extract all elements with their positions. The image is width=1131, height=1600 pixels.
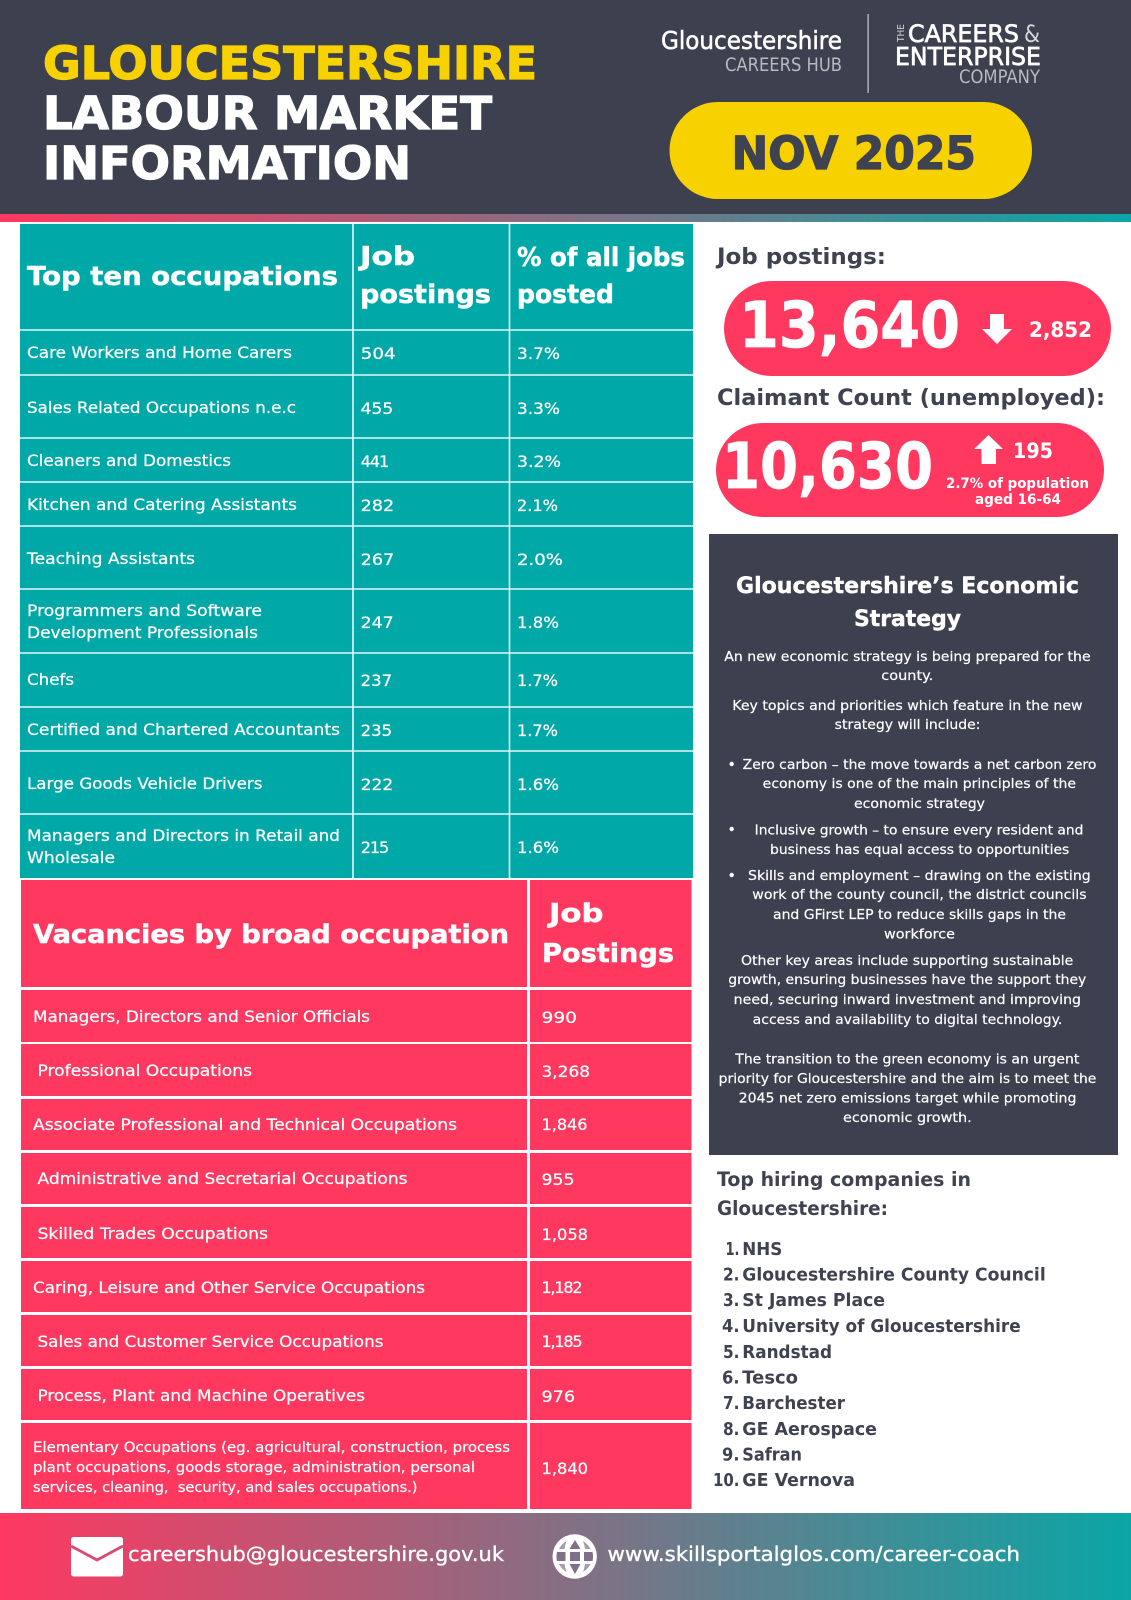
icon: globe: [552, 1534, 597, 1579]
row: Teaching: Teaching Assistants: [26, 549, 195, 568]
panel: job postings: [715, 244, 1111, 376]
row: Accountants: 235: [361, 721, 392, 740]
row: Managers: [21, 990, 692, 1042]
row: Kitchen: [27, 495, 558, 515]
row: Sales: 1,185: [542, 1332, 582, 1351]
row: Managers and Directors: 215: [361, 838, 389, 857]
numbered list: 7.: [723, 1394, 740, 1414]
panel: job postings: 2,852: [1029, 318, 1092, 342]
table header: Job: [358, 242, 415, 272]
row: Elementary: plant occupations, goods storage, administration, personal: [33, 1460, 475, 1476]
numbered list: 5.: [723, 1343, 740, 1363]
table header: postings: [360, 280, 491, 310]
email address: careershub@gloucestershire.gov.uk: [128, 1542, 504, 1566]
panel: claimant count: 195: [1013, 439, 1053, 464]
row: Skilled Trades: 1,058: [542, 1225, 588, 1244]
row: LGV Drivers: 1.6%: [517, 775, 559, 794]
row: Programmers: Programmers and Software: [27, 601, 262, 620]
logo: The Careers and Enterprise Company: CAREERS: [908, 20, 1019, 48]
row: LGV Drivers: [27, 774, 559, 794]
logo: The Careers and Enterprise Company: COMPANY: [959, 66, 1040, 88]
panel heading: Strategy: [854, 607, 961, 632]
numbered list: [713, 1240, 1046, 1491]
row: Kitchen: 2.1%: [517, 496, 558, 515]
icon: envelope: [71, 1537, 123, 1576]
numbered list: 10.: [713, 1471, 740, 1491]
row: Elementary: services, cleaning, security, and sales occupations.): [33, 1480, 418, 1496]
row: Programmers: 1.8%: [517, 613, 559, 632]
row: Kitchen: Kitchen and Catering Assistants: [27, 495, 297, 514]
vacancies header: Job: [547, 899, 604, 929]
table: vacancies by broad occupation: [21, 880, 692, 1509]
intro text: county.: [881, 669, 933, 684]
closing text: Other key areas include supporting sustainable: [741, 954, 1073, 969]
row: Care Workers: [27, 343, 560, 363]
title: GLOUCESTERSHIRE: [43, 37, 537, 90]
companies heading: [717, 1168, 971, 1220]
row: Associate Professional: 1,846: [542, 1115, 588, 1134]
vacancies header: Vacancies by broad occupation: [33, 920, 509, 950]
row: Administrative: [21, 1153, 692, 1204]
bullet list: Zero carbon – the move towards a net carbon zero: [743, 758, 1096, 773]
numbered list: 2.: [723, 1266, 740, 1286]
row: Caring: Caring, Leisure and Other Service Occupations: [33, 1278, 425, 1297]
table header: Top ten occupations: [27, 262, 338, 292]
bullet list: business has equal access to opportunities: [770, 843, 1069, 858]
row: Associate Professional: Associate Professional and Technical Occupations: [33, 1115, 457, 1134]
numbered list: GE Vernova: [742, 1471, 855, 1491]
numbered list: 9.: [722, 1446, 740, 1466]
panel: job postings: 13,640: [739, 289, 960, 362]
panel: top hiring companies: [713, 1168, 1046, 1491]
row: Associate Professional: [21, 1099, 692, 1150]
panel: job postings: Job postings:: [715, 244, 886, 270]
row: Sales: Sales and Customer Service Occupations: [38, 1332, 384, 1351]
closing text: access and availability to digital technology.: [753, 1013, 1062, 1028]
bullet list: Inclusive growth – to ensure every resident and: [755, 824, 1083, 838]
row: Sales: [21, 1315, 692, 1366]
row: Caring: 1,182: [542, 1278, 582, 1297]
logo: The Careers and Enterprise Company: [895, 20, 1041, 88]
table header: posted: [517, 280, 614, 310]
panel: economic strategy: [709, 534, 1118, 1155]
row: LGV Drivers: 222: [361, 775, 393, 794]
row: Teaching: 267: [361, 550, 394, 569]
table: top ten occupations: [20, 224, 693, 878]
row: Managers and Directors: Managers and Directors in Retail and: [27, 826, 340, 845]
row: Managers and Directors: Wholesale: [27, 848, 115, 867]
row: Skilled Trades: Skilled Trades Occupations: [38, 1224, 268, 1243]
companies heading: Top hiring companies in: [717, 1168, 971, 1191]
row: Cleaners: [27, 451, 561, 471]
row: Kitchen: 282: [361, 496, 394, 515]
panel heading: Gloucestershire’s Economic: [736, 574, 1079, 599]
date pill: [670, 102, 1032, 199]
closing text: growth, ensuring businesses have the support they: [728, 973, 1086, 988]
row: Programmers: Development Professionals: [27, 623, 258, 642]
row: Sales Related: [27, 398, 560, 418]
row: Managers and Directors: 1.6%: [517, 838, 559, 857]
row: Elementary: [21, 1423, 692, 1509]
row: Chefs: [27, 670, 558, 690]
row: Chefs: Chefs: [27, 670, 74, 689]
row: Accountants: [27, 720, 558, 740]
logo: The Careers and Enterprise Company: THE: [896, 24, 907, 43]
row: Elementary: Elementary Occupations (eg. agricultural, construction, process: [33, 1440, 510, 1456]
panel heading: [736, 574, 1079, 632]
row: Sales Related: Sales Related Occupations n.e.c: [27, 398, 296, 417]
bullet list: economic strategy: [854, 797, 985, 812]
numbered list: University of Gloucestershire: [742, 1317, 1021, 1337]
date pill: NOV 2025: [732, 127, 976, 180]
title: INFORMATION: [43, 137, 411, 190]
row: Care Workers: 3.7%: [517, 344, 560, 363]
icon: arrow down: [982, 314, 1012, 344]
logo: Gloucestershire Careers Hub: [661, 26, 842, 76]
row: Programmers: 247: [361, 613, 394, 632]
row: Sales Related: 3.3%: [517, 399, 560, 418]
logo: Gloucestershire Careers Hub: CAREERS HUB: [725, 54, 842, 76]
row: Elementary: 1,840: [542, 1459, 588, 1478]
closing text: [719, 954, 1096, 1126]
row: Cleaners: 441: [361, 452, 389, 471]
row: Teaching: [26, 549, 563, 569]
row: Caring: [21, 1261, 692, 1312]
numbered list: Randstad: [742, 1343, 832, 1363]
row: Chefs: 1.7%: [517, 671, 558, 690]
row: Process: Process, Plant and Machine Operatives: [38, 1386, 365, 1405]
bullet list: economy is one of the main principles of the: [763, 777, 1076, 792]
logo: The Careers and Enterprise Company: ENTERPRISE: [895, 42, 1041, 71]
row: Accountants: Certified and Chartered Accountants: [27, 720, 340, 739]
table header: % of all jobs: [517, 243, 685, 273]
bullet list: Skills and employment – drawing on the existing: [748, 869, 1091, 884]
intro text: [724, 650, 1091, 733]
row: Administrative: Administrative and Secretarial Occupations: [38, 1169, 408, 1188]
row: Cleaners: 3.2%: [517, 452, 561, 471]
table header: [27, 242, 685, 310]
closing text: economic growth.: [843, 1111, 972, 1126]
footer: [0, 1513, 1131, 1600]
row: Cleaners: Cleaners and Domestics: [27, 451, 231, 470]
numbered list: Tesco: [742, 1369, 798, 1389]
panel: claimant count: aged 16-64: [975, 492, 1061, 508]
intro text: Key topics and priorities which feature in the new: [732, 699, 1083, 714]
row: Administrative: 955: [542, 1170, 574, 1189]
row: Professional: [21, 1044, 692, 1096]
numbered list: Barchester: [742, 1394, 845, 1414]
numbered list: 4.: [722, 1317, 740, 1337]
vacancies header: Postings: [542, 939, 674, 969]
title: LABOUR MARKET: [43, 87, 492, 140]
numbered list: GE Aerospace: [742, 1420, 877, 1440]
header banner: [0, 0, 1131, 222]
logo: The Careers and Enterprise Company: &: [1024, 20, 1040, 48]
row: Managers: 990: [542, 1008, 577, 1027]
row: Managers: Managers, Directors and Senior Officials: [33, 1007, 370, 1026]
intro text: strategy will include:: [835, 718, 980, 733]
bullet list: [730, 758, 1096, 943]
panel: claimant count: Claimant Count (unemployed):: [717, 385, 1105, 411]
intro text: An new economic strategy is being prepared for the: [724, 650, 1091, 665]
row: Process: 976: [542, 1387, 575, 1406]
closing text: need, securing inward investment and improving: [734, 993, 1081, 1008]
closing text: 2045 net zero emissions target while promoting: [739, 1092, 1076, 1107]
row: Skilled Trades: [21, 1207, 692, 1258]
row: Process: [21, 1369, 692, 1420]
row: Professional: Professional Occupations: [38, 1061, 252, 1080]
row: Care Workers: 504: [361, 344, 396, 363]
bullet list: and GFirst LEP to reduce skills gaps in the: [773, 908, 1066, 923]
row: Accountants: 1.7%: [517, 721, 558, 740]
website address: www.skillsportalglos.com/career-coach: [608, 1542, 1020, 1566]
vacancies header: [21, 880, 692, 987]
row: Care Workers: Care Workers and Home Carers: [27, 343, 292, 362]
panel: claimant count: 2.7% of population: [946, 476, 1089, 492]
icon: arrow up: [974, 435, 1003, 464]
bullet list: work of the county council, the district councils: [752, 888, 1087, 903]
numbered list: St James Place: [742, 1291, 885, 1311]
row: Teaching: 2.0%: [517, 550, 563, 569]
row: Professional: 3,268: [542, 1062, 590, 1081]
companies heading: Gloucestershire:: [717, 1197, 888, 1220]
row: Chefs: 237: [361, 671, 392, 690]
closing text: The transition to the green economy is an urgent: [734, 1052, 1079, 1068]
row: LGV Drivers: Large Goods Vehicle Drivers: [27, 774, 262, 793]
numbered list: 8.: [723, 1420, 740, 1440]
bullet list: workforce: [884, 928, 955, 943]
title: [43, 37, 537, 190]
row: Programmers: [27, 601, 559, 642]
numbered list: Safran: [742, 1446, 802, 1466]
panel: claimant count: [716, 385, 1105, 517]
closing text: priority for Gloucestershire and the aim is to meet the: [719, 1072, 1096, 1087]
numbered list: Gloucestershire County Council: [742, 1266, 1046, 1286]
numbered list: 1.: [726, 1240, 740, 1260]
logo: Gloucestershire Careers Hub: Gloucestershire: [661, 26, 842, 55]
numbered list: NHS: [742, 1240, 782, 1260]
numbered list: 6.: [722, 1369, 740, 1389]
panel: claimant count: 10,630: [722, 430, 933, 503]
row: Sales Related: 455: [361, 399, 393, 418]
row: Managers and Directors: [27, 826, 559, 867]
numbered list: 3.: [723, 1291, 740, 1311]
